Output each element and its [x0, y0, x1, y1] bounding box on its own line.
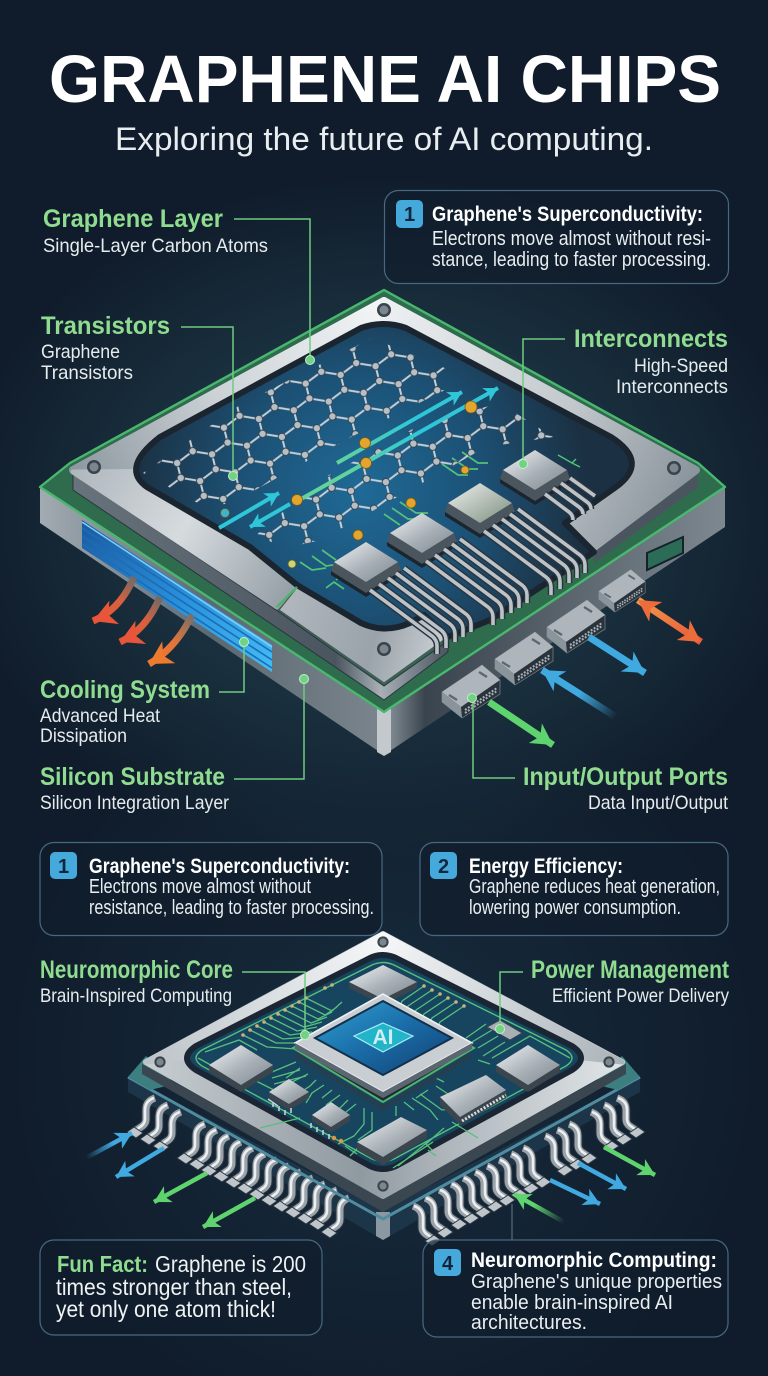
- subtitle: Exploring the future of AI computing.: [115, 121, 653, 157]
- neuromorphic chip illustration: [86, 934, 655, 1246]
- electrons: [220, 401, 477, 568]
- callout: superconductivity (top): 1: [404, 204, 415, 226]
- label: silicon substrate: Silicon Integration Layer: [40, 792, 229, 814]
- callout: fun fact: Fun Fact:: [57, 1251, 148, 1277]
- circuit traces: [198, 986, 570, 1168]
- label: graphene layer: Graphene Layer: [43, 205, 223, 233]
- label: cooling system: Advanced Heat: [40, 705, 161, 727]
- label: cooling system: [40, 638, 248, 747]
- label: neuromorphic core: [40, 956, 310, 1040]
- label: interconnects: [518, 325, 728, 468]
- data arrows: [489, 600, 701, 745]
- callout: superconductivity (top): stance, leading to faster processing.: [432, 249, 711, 271]
- label: transistors: Transistors: [41, 362, 133, 384]
- label: cooling system: Dissipation: [40, 725, 127, 747]
- label: input/output ports: Data Input/Output: [588, 792, 729, 814]
- label: interconnects: High-Speed: [634, 355, 728, 377]
- label: interconnects: Interconnects: [574, 325, 728, 353]
- cooling system panel: [82, 520, 272, 672]
- label: input/output ports: Input/Output Ports: [523, 763, 728, 791]
- callout: energy efficiency: 2: [438, 856, 449, 878]
- callout: neuromorphic computing: Graphene's unique properties: [471, 1271, 722, 1293]
- callout: superconductivity: Graphene's Superconductivity:: [89, 855, 350, 878]
- surface components: [209, 965, 560, 1165]
- callout: superconductivity (top): [384, 190, 728, 284]
- callout: fun fact: yet only one atom thick!: [56, 1296, 276, 1322]
- frame screws: [87, 303, 681, 656]
- callout: superconductivity: 1: [58, 856, 69, 878]
- AI text: AI: [372, 1026, 394, 1049]
- callout: neuromorphic computing: 4: [442, 1253, 454, 1275]
- callout: fun fact: [40, 1240, 322, 1335]
- label: transistors: Transistors: [41, 312, 170, 340]
- frame lower lip: [73, 474, 698, 700]
- callout: neuromorphic computing: enable brain-inspired AI: [471, 1292, 673, 1314]
- label: neuromorphic core: Neuromorphic Core: [40, 956, 233, 984]
- heat arrows: [93, 577, 192, 664]
- callout: energy efficiency: [420, 842, 728, 936]
- label: transistors: [41, 312, 238, 480]
- chip pins: right side: [413, 1098, 645, 1246]
- teal rim: [128, 1056, 640, 1219]
- callout: energy efficiency: Energy Efficiency:: [469, 855, 623, 878]
- metal frame bars: [73, 301, 696, 683]
- label: silicon substrate: Silicon Substrate: [40, 763, 225, 791]
- label: cooling system: Cooling System: [40, 676, 210, 704]
- label: silicon substrate: [40, 674, 308, 814]
- callout: energy efficiency: lowering power consumption.: [469, 897, 681, 919]
- central AI die: [293, 994, 474, 1108]
- lower body: [128, 1077, 640, 1240]
- output ports: [442, 537, 683, 718]
- PCB traces: [300, 452, 488, 589]
- frame screws: [154, 936, 615, 1192]
- signal arrows: [86, 1133, 655, 1227]
- label: graphene layer: [43, 205, 314, 364]
- callout: superconductivity: Electrons move almost without: [89, 876, 311, 898]
- chip pins: left side: [127, 1098, 349, 1238]
- callout: superconductivity (top): Electrons move almost without resi-: [432, 228, 711, 250]
- label: graphene layer: Single-Layer Carbon Atoms: [43, 235, 268, 257]
- via dots: [241, 983, 466, 1143]
- label: power management: [496, 956, 730, 1034]
- callout: fun fact: Graphene is 200: [155, 1251, 306, 1277]
- label: input/output ports: [468, 694, 729, 814]
- label: transistors: Graphene: [41, 341, 120, 363]
- green circuit board rim: [40, 290, 725, 712]
- label: interconnects: Interconnects: [616, 376, 728, 398]
- callout: superconductivity: resistance, leading to faster processing.: [89, 897, 374, 919]
- callout: neuromorphic computing: [423, 1204, 728, 1337]
- callout: neuromorphic computing: architectures.: [471, 1312, 587, 1334]
- main graphene chip illustration: [40, 290, 725, 756]
- title: GRAPHENE AI CHIPS: [49, 42, 721, 117]
- graphene lattice: [143, 338, 553, 547]
- frame joint: [277, 587, 297, 607]
- transistors with leads: [331, 450, 595, 654]
- window interior: [136, 324, 632, 637]
- chip body: side faces: [40, 487, 725, 756]
- label: power management: Efficient Power Delivery: [552, 985, 729, 1007]
- interconnect trace: [558, 455, 580, 467]
- callout: fun fact: times stronger than steel,: [56, 1274, 292, 1300]
- label: power management: Power Management: [531, 956, 730, 984]
- callout: superconductivity: [40, 842, 382, 936]
- callout: superconductivity (top): Graphene's Superconductivity:: [432, 203, 703, 226]
- electron flow arrows: [219, 388, 498, 528]
- metal frame: [142, 934, 626, 1212]
- callout: neuromorphic computing: Neuromorphic Computing:: [471, 1249, 717, 1272]
- label: neuromorphic core: Brain-Inspired Computing: [40, 985, 232, 1007]
